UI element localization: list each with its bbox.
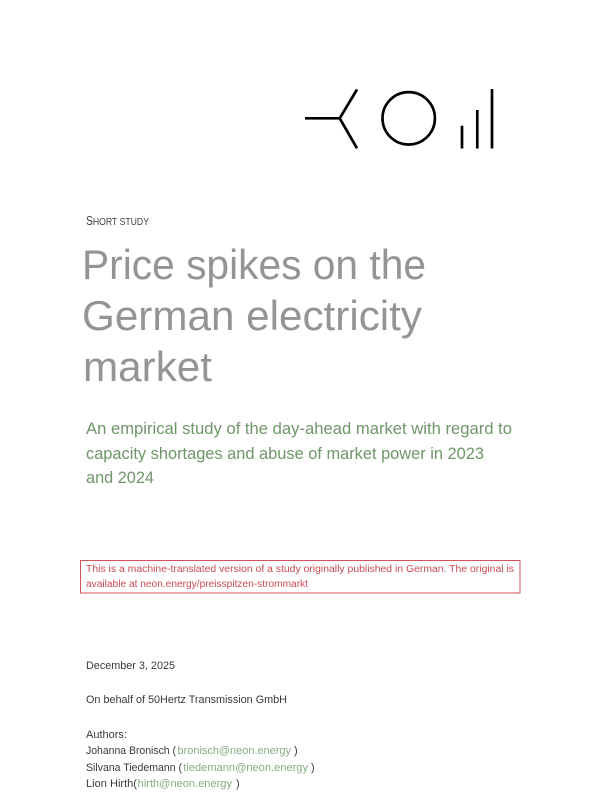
icon: three ascending bars <box>462 89 492 148</box>
subtitle: An empirical study of the day-ahead market with regard to <box>86 420 512 438</box>
subtitle: capacity shortages and abuse of market power in 2023 <box>86 445 484 463</box>
title: German electricity <box>82 292 422 339</box>
authors block: tiedemann@neon.energy <box>183 762 308 774</box>
subtitle <box>86 420 512 487</box>
title: Price spikes on the <box>82 241 426 288</box>
authors block: Johanna Bronisch ( <box>86 745 176 757</box>
authors block: Lion Hirth( <box>86 778 137 790</box>
title <box>82 241 426 390</box>
icon: forked line <box>305 90 357 148</box>
subtitle: and 2024 <box>86 469 154 487</box>
logo: neon icon group <box>305 89 492 148</box>
title: market <box>83 343 212 390</box>
authors block: ) <box>294 745 298 757</box>
authors block: bronisch@neon.energy <box>178 745 291 757</box>
callout: machine translation notice: available at neon.energy/preisspitzen-strommarkt <box>86 579 308 590</box>
authors block: Authors: <box>86 729 127 741</box>
authors block: Silvana Tiedemann ( <box>86 762 182 774</box>
client line: On behalf of 50Hertz Transmission GmbH <box>86 694 287 706</box>
date: December 3, 2025 <box>86 660 175 672</box>
authors block: ) <box>236 778 240 790</box>
icon: circle <box>382 92 435 144</box>
authors block: ) <box>311 762 315 774</box>
callout: machine translation notice <box>80 560 520 593</box>
authors block <box>86 729 315 790</box>
authors block: hirth@neon.energy <box>138 778 232 790</box>
callout: machine translation notice: This is a machine-translated version of a study originally published in German. The original is <box>86 564 514 575</box>
label: short study: SHORT STUDY <box>86 214 149 228</box>
